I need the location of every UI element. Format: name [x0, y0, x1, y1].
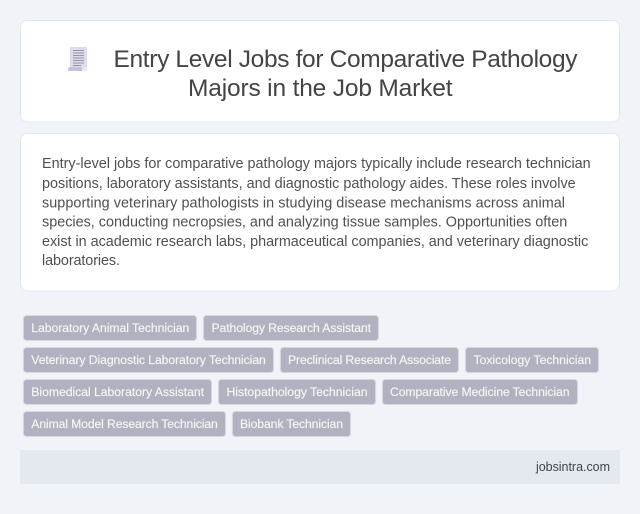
tag: Veterinary Diagnostic Laboratory Technician: Veterinary Diagnostic Laboratory Technician	[31, 353, 266, 367]
tag: Veterinary Diagnostic Laboratory Technician	[24, 348, 274, 372]
tag: Laboratory Animal Technician: Laboratory Animal Technician	[31, 321, 189, 335]
description text	[42, 156, 591, 269]
description text: supporting veterinary pathologists in studying disease mechanisms across animal	[42, 196, 565, 212]
tag: Biomedical Laboratory Assistant	[24, 380, 212, 404]
panel: description	[20, 134, 620, 291]
tag: Comparative Medicine Technician: Comparative Medicine Technician	[390, 385, 570, 399]
tag: Animal Model Research Technician	[24, 412, 226, 436]
tag: Histopathology Technician	[218, 380, 376, 404]
tag list	[24, 316, 598, 436]
tag: Pathology Research Assistant: Pathology Research Assistant	[212, 321, 372, 335]
tag: Histopathology Technician: Histopathology Technician	[226, 385, 368, 399]
tag: Toxicology Technician	[466, 348, 598, 372]
panel: title header	[20, 20, 620, 122]
tag: Laboratory Animal Technician	[24, 316, 196, 340]
title text	[114, 46, 578, 102]
tag: Toxicology Technician: Toxicology Technician	[474, 353, 591, 367]
tag: Biobank Technician	[232, 412, 350, 436]
title text: Entry Level Jobs for Comparative Pathology	[114, 46, 578, 73]
tag: Biobank Technician: Biobank Technician	[240, 417, 343, 431]
tag: Animal Model Research Technician: Animal Model Research Technician	[31, 417, 218, 431]
tag: Preclinical Research Associate: Preclinical Research Associate	[288, 353, 451, 367]
description text: laboratories.	[42, 253, 120, 269]
tag: Comparative Medicine Technician	[382, 380, 578, 404]
tag: Preclinical Research Associate	[280, 348, 458, 372]
tag: Biomedical Laboratory Assistant: Biomedical Laboratory Assistant	[31, 385, 205, 399]
icon: paper scroll	[68, 47, 87, 72]
footer text: source: jobsintra.com	[535, 460, 610, 474]
description text: Entry-level jobs for comparative pathology majors typically include research technician	[42, 156, 591, 172]
tag: Pathology Research Assistant	[204, 316, 378, 340]
description text: positions, laboratory assistants, and diagnostic pathology aides. These roles involve	[42, 176, 576, 192]
description text: species, conducting necropsies, and analyzing tissue samples. Opportunities often	[42, 214, 567, 230]
description text: exist in academic research labs, pharmaceutical companies, and veterinary diagnostic	[42, 234, 588, 250]
title text: Majors in the Job Market	[188, 75, 453, 102]
footer bar	[20, 450, 620, 484]
